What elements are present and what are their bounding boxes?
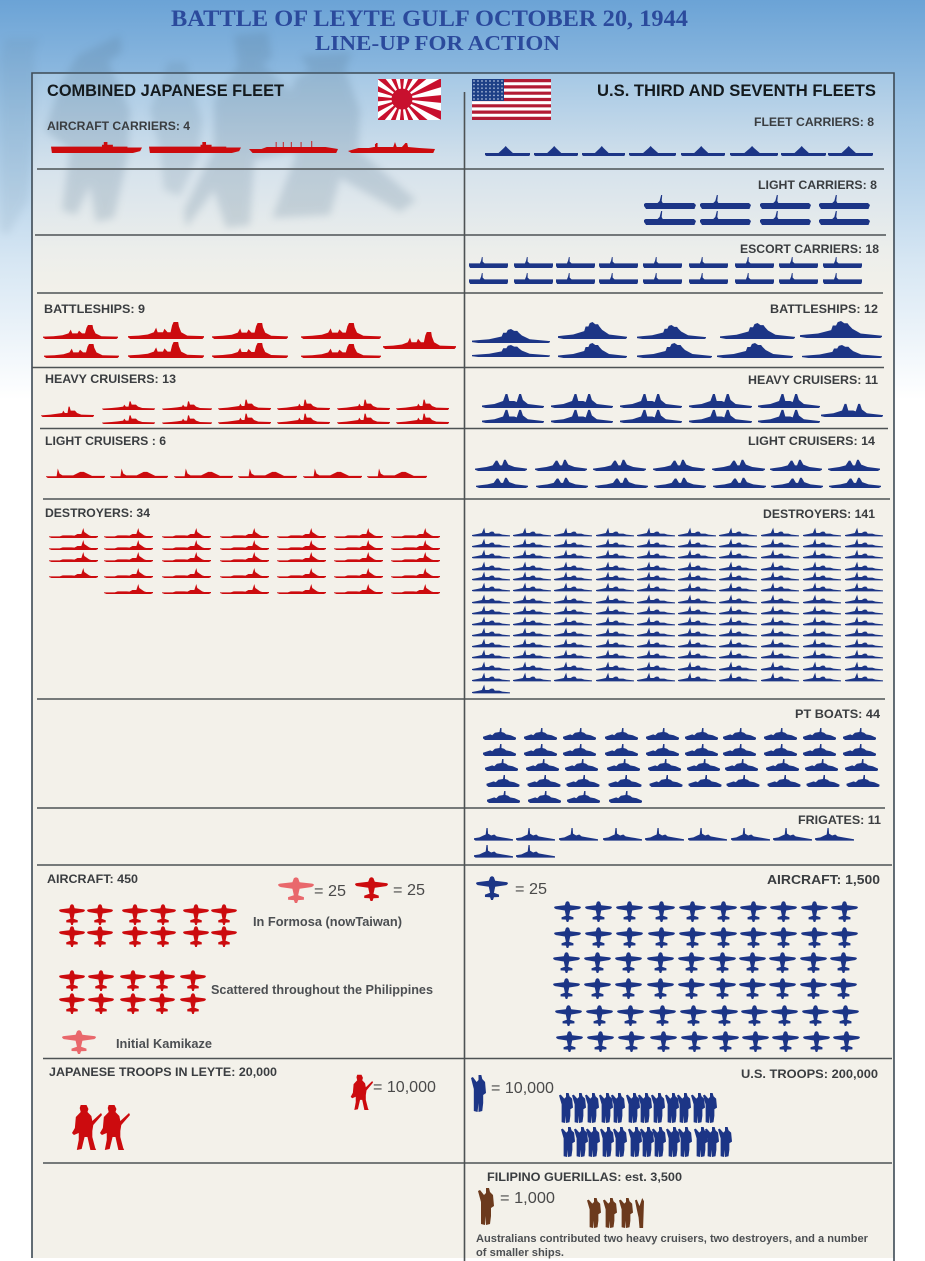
legend: Filipino guerillas [478, 1188, 555, 1225]
icons: Japanese troops [72, 1105, 130, 1150]
icons: US aircraft [553, 901, 860, 1052]
ships: JP light cruisers [46, 468, 427, 478]
note: Australian contribution: Australians contributed two heavy cruisers, two destroyers, and a number [476, 1233, 869, 1245]
ships: US escort carriers [469, 257, 862, 284]
icons: Filipino guerillas [587, 1198, 644, 1228]
heading: Japanese fleet: COMBINED JAPANESE FLEET [47, 81, 285, 100]
label: JP aircraft: AIRCRAFT: 450 [47, 874, 138, 886]
legend: US aircraft: = 25 [515, 881, 547, 898]
label: US escort carriers: ESCORT CARRIERS: 18 [740, 244, 880, 256]
ships: PT boats [483, 728, 880, 803]
ships: JP destroyers [49, 528, 440, 594]
ships: US battleships [472, 321, 882, 358]
label: JP heavy cruisers: HEAVY CRUISERS: 13 [45, 374, 176, 386]
legend: Japanese troops [351, 1075, 436, 1110]
icon: rising sun flag [378, 79, 441, 120]
ships: JP heavy cruisers [41, 400, 449, 424]
legend: JP aircraft: = 25 [314, 883, 346, 900]
ships: US destroyers [472, 528, 883, 693]
title: LINE-UP FOR ACTION [315, 31, 560, 55]
label: Filipino guerillas: FILIPINO GUERILLAS: est. 3,500 [487, 1172, 682, 1184]
label: PT boats: PT BOATS: 44 [795, 709, 881, 721]
ships: JP battleships [43, 322, 456, 358]
legend: US troops: = 10,000 [491, 1080, 554, 1097]
label: US heavy cruisers: HEAVY CRUISERS: 11 [748, 375, 879, 387]
label: US fleet carriers: FLEET CARRIERS: 8 [754, 117, 875, 129]
legend: Filipino guerillas: = 1,000 [500, 1190, 555, 1207]
legend: JP aircraft: = 25 [393, 882, 425, 899]
ships: JP aircraft carriers [51, 141, 435, 153]
label: US troops: U.S. TROOPS: 200,000 [741, 1069, 878, 1081]
label: JP destroyers: DESTROYERS: 34 [45, 508, 151, 520]
note: Australian contribution: of smaller ships. [476, 1247, 564, 1259]
legend: JP aircraft [278, 877, 425, 903]
legend: US troops [471, 1075, 554, 1112]
ships: frigates [474, 828, 854, 858]
label: US destroyers: DESTROYERS: 141 [763, 509, 876, 521]
icons: US troops [559, 1093, 732, 1157]
ships: US light carriers [644, 195, 870, 225]
title [171, 6, 689, 55]
label: US battleships: BATTLESHIPS: 12 [770, 304, 878, 316]
label: kamikaze: Initial Kamikaze [116, 1037, 212, 1051]
label: US aircraft: AIRCRAFT: 1,500 [767, 873, 880, 887]
label: Philippines: Scattered throughout the Philippines [211, 983, 433, 997]
photo: faded troops wading ashore [0, 32, 416, 235]
icon: initial kamikaze [62, 1030, 96, 1054]
title: BATTLE OF LEYTE GULF OCTOBER 20, 1944 [171, 6, 689, 31]
page background [0, 0, 925, 400]
label: JP light cruisers: LIGHT CRUISERS : 6 [45, 436, 166, 448]
icon: US flag [472, 79, 551, 120]
label: US light carriers: LIGHT CARRIERS: 8 [758, 180, 878, 192]
icons: aircraft in the Philippines [59, 970, 206, 1014]
heading: US fleets: U.S. THIRD AND SEVENTH FLEETS [597, 81, 876, 100]
label: JP battleships: BATTLESHIPS: 9 [44, 304, 145, 316]
ships: US fleet carriers [485, 146, 873, 156]
ships: US light cruisers [475, 460, 881, 488]
legend: US aircraft [476, 876, 547, 900]
legend: Japanese troops: = 10,000 [373, 1079, 436, 1096]
note: Australian contribution [476, 1233, 869, 1259]
ships: US heavy cruisers [482, 394, 883, 423]
icons: aircraft in Formosa [59, 904, 237, 947]
label: Formosa: In Formosa (nowTaiwan) [253, 915, 402, 929]
label: US light cruisers: LIGHT CRUISERS: 14 [748, 436, 876, 448]
label: frigates: FRIGATES: 11 [798, 815, 882, 827]
label: JP aircraft carriers: AIRCRAFT CARRIERS: 4 [47, 121, 191, 133]
label: Japanese troops: JAPANESE TROOPS IN LEYTE: 20,000 [49, 1067, 277, 1079]
